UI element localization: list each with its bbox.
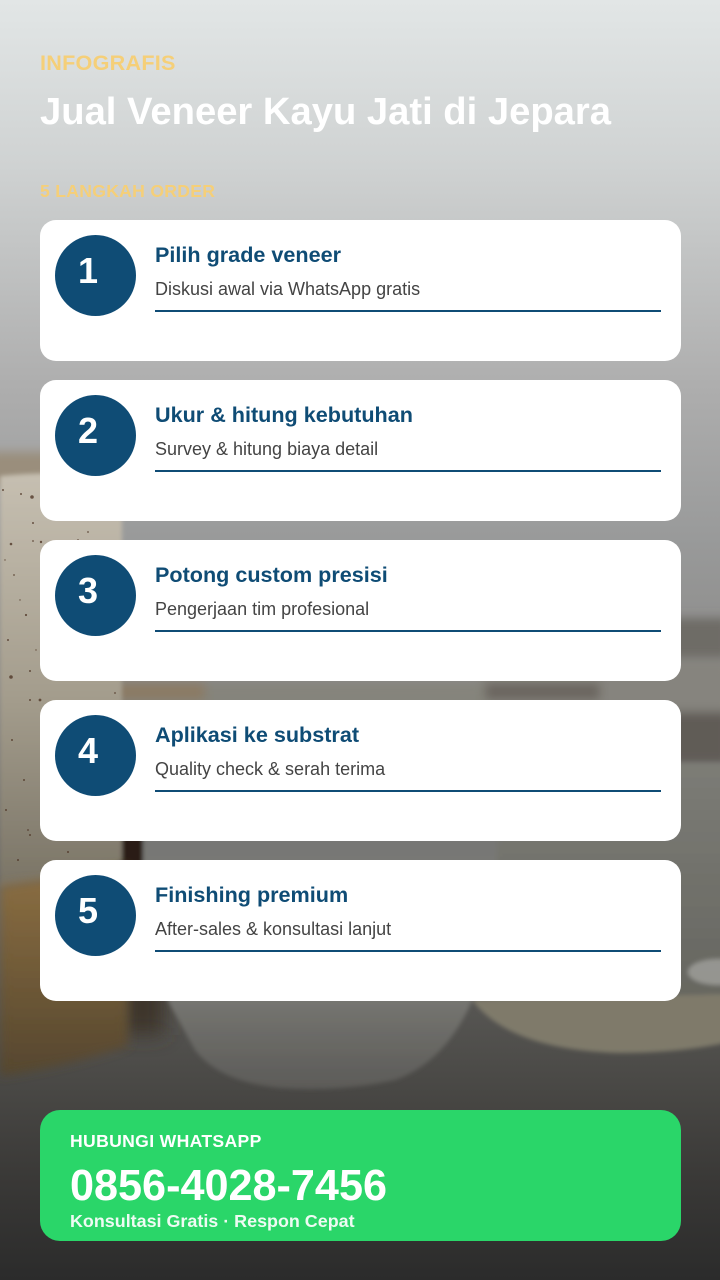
step 3 number: 3 (78, 570, 98, 611)
WhatsApp contact panel (40, 1110, 681, 1241)
step 3 card (40, 540, 681, 681)
step 1 card (40, 220, 681, 361)
step 5 heading: Finishing premium (155, 882, 348, 907)
contact note: Konsultasi Gratis · Respon Cepat (70, 1211, 355, 1231)
section heading: 5 LANGKAH ORDER (40, 181, 215, 201)
step 2 badge (55, 395, 136, 476)
step 2 card (40, 380, 681, 521)
step 5 number: 5 (78, 890, 98, 931)
eyebrow label: INFOGRAFIS (40, 50, 176, 75)
step 1 description: Diskusi awal via WhatsApp gratis (155, 279, 420, 299)
contact label: HUBUNGI WHATSAPP (70, 1131, 262, 1151)
step 5 badge (55, 875, 136, 956)
step 5 card (40, 860, 681, 1001)
phone number: 0856-4028-7456 (70, 1162, 387, 1210)
step 1 number: 1 (78, 250, 98, 291)
title: Jual Veneer Kayu Jati di Jepara (40, 90, 611, 133)
step 5 description: After-sales & konsultasi lanjut (155, 919, 391, 939)
step 2 number: 2 (78, 410, 98, 451)
step 4 number: 4 (78, 730, 98, 771)
step 4 card (40, 700, 681, 841)
step 1 badge (55, 235, 136, 316)
step 1 heading: Pilih grade veneer (155, 242, 341, 267)
step 3 badge (55, 555, 136, 636)
step 2 description: Survey & hitung biaya detail (155, 439, 378, 459)
speckles on the left pot (2, 489, 116, 861)
step 4 badge (55, 715, 136, 796)
step 4 heading: Aplikasi ke substrat (155, 722, 359, 747)
step 2 heading: Ukur & hitung kebutuhan (155, 402, 413, 427)
step 3 heading: Potong custom presisi (155, 562, 388, 587)
step 4 description: Quality check & serah terima (155, 759, 385, 779)
step 3 description: Pengerjaan tim profesional (155, 599, 369, 619)
